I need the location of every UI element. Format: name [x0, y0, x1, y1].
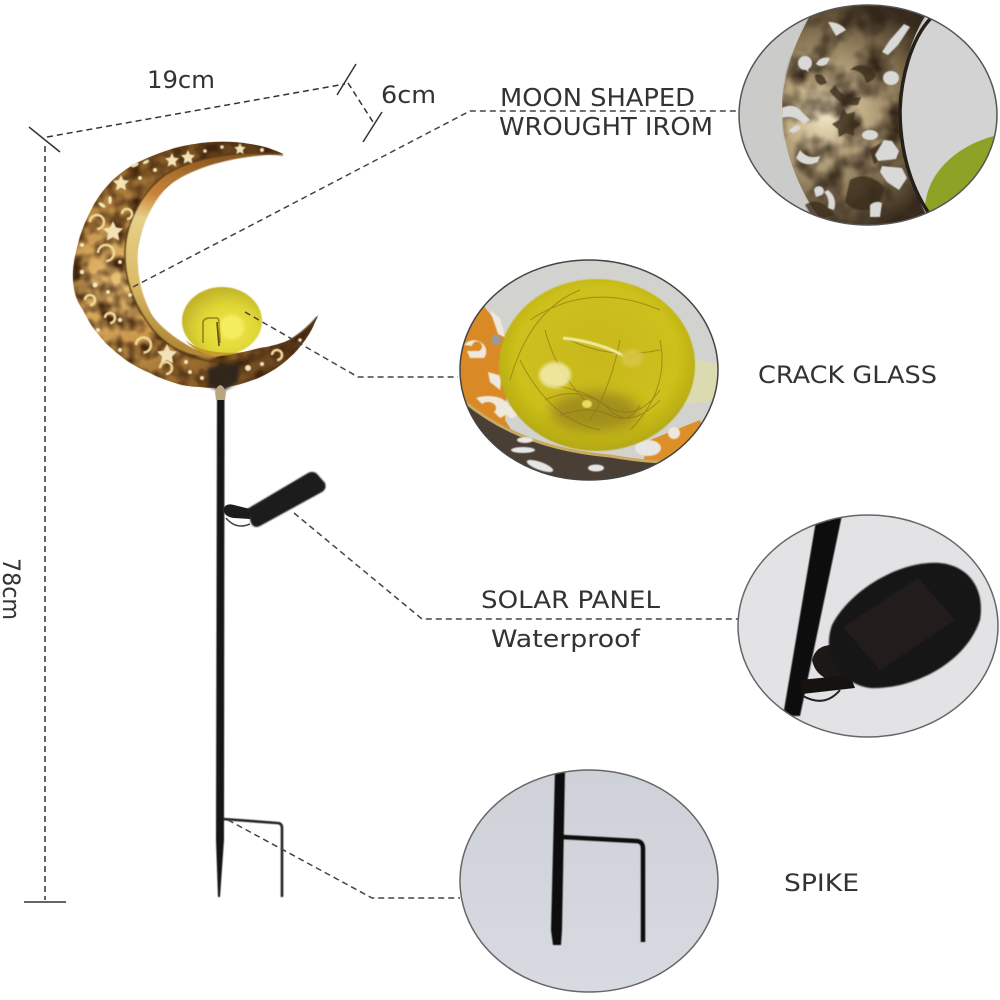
callout: crack glass: CRACK GLASS	[758, 361, 937, 389]
crescent moon	[73, 142, 318, 400]
callout: solar panel waterproof: Waterproof	[491, 625, 641, 653]
moon inner wall	[125, 153, 283, 358]
dimension: depth 6cm	[348, 81, 436, 142]
callout: solar panel waterproof: SOLAR PANEL	[481, 586, 661, 614]
product: stake light	[73, 142, 326, 897]
callout: moon shaped wrought iron: MOON SHAPED	[500, 83, 695, 112]
callout: spike	[228, 820, 859, 898]
callout: crack glass	[245, 312, 937, 389]
solar panel	[224, 472, 326, 527]
metal dark patterns	[805, 65, 885, 221]
callout: moon shaped wrought iron	[133, 83, 738, 287]
detail circle: solar panel	[738, 515, 998, 737]
dimension: depth 6cm: 6cm	[381, 81, 436, 109]
crack glass ball	[182, 287, 262, 357]
detail circle: spike	[459, 770, 718, 993]
ground spike	[223, 819, 282, 897]
detail circle: moon metal	[738, 5, 998, 226]
dimension: overall width 19cm: 19cm	[147, 66, 215, 94]
callout: spike: SPIKE	[784, 869, 859, 897]
moon cutouts: dots	[80, 145, 302, 380]
dimension: overall width 19cm	[29, 64, 356, 152]
moon cutouts: curls	[85, 209, 282, 374]
metal cutouts	[782, 22, 910, 217]
callout: solar panel waterproof	[294, 513, 738, 653]
detail circle: crack glass	[455, 260, 720, 490]
stake	[216, 390, 224, 897]
moon cutouts: stars	[103, 143, 246, 364]
callout: moon shaped wrought iron: WROUGHT IROM	[499, 112, 713, 141]
stake collar	[215, 385, 226, 400]
